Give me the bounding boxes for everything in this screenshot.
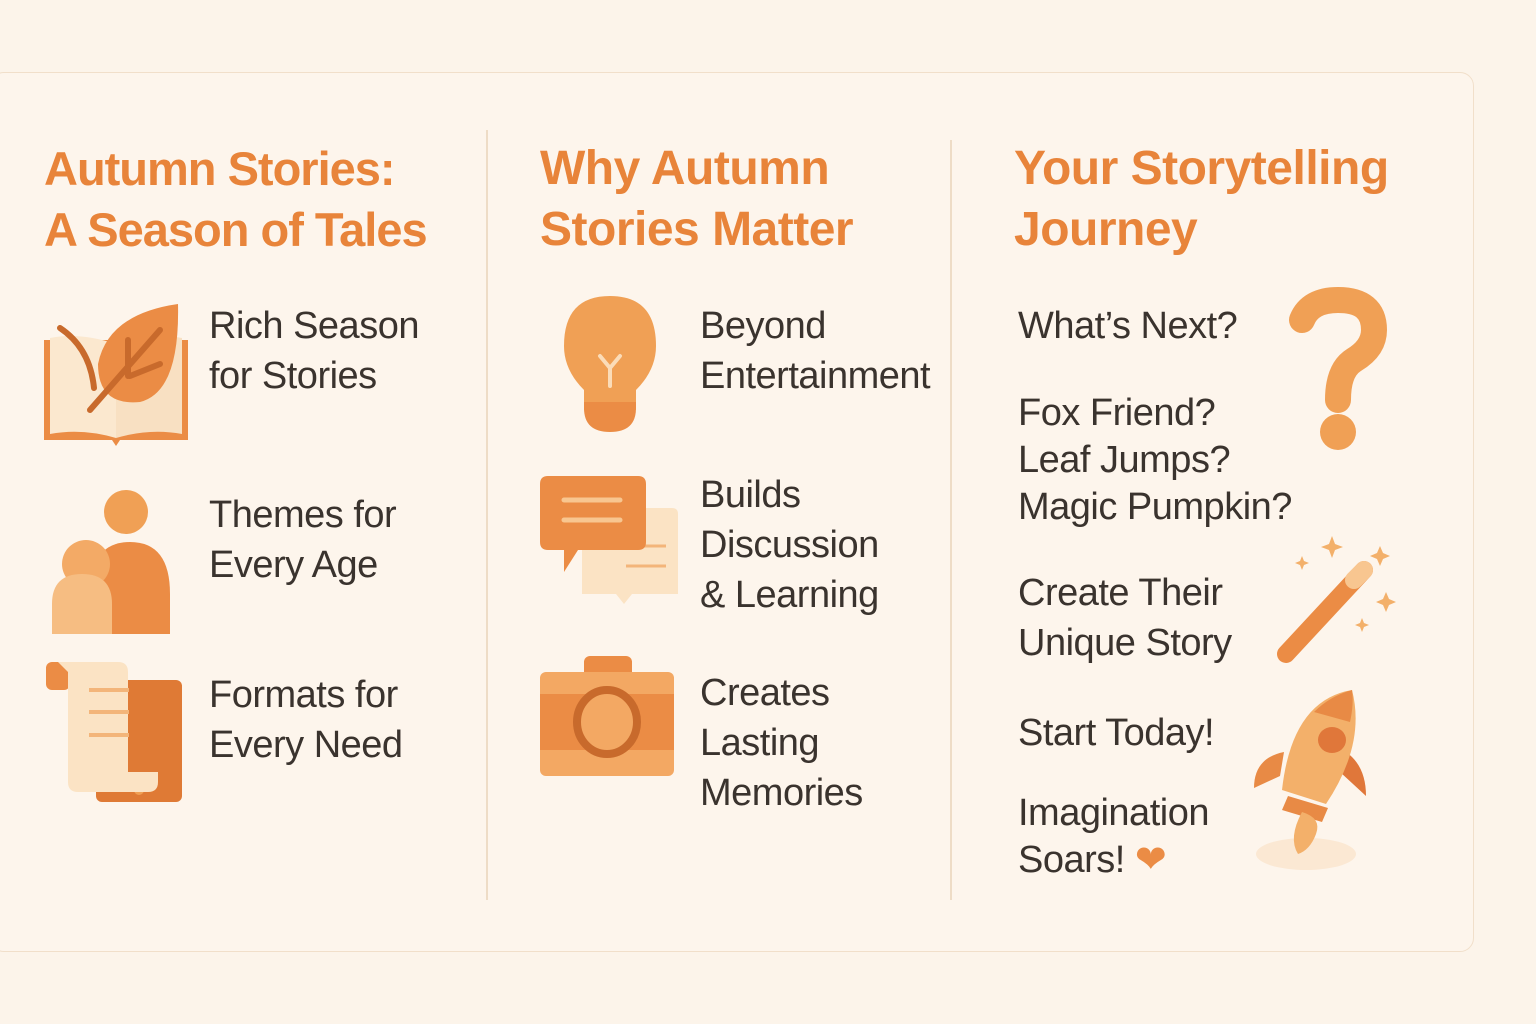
text: create story: Unique Story — [1018, 622, 1232, 664]
text: builds discussion — [700, 474, 879, 616]
heading: column 2: Why Autumn — [540, 142, 829, 195]
heading: column 2 — [540, 142, 853, 256]
text: formats — [209, 674, 403, 766]
text: questions: Fox Friend? — [1018, 392, 1215, 434]
text: builds discussion: Discussion — [700, 524, 879, 566]
text: imagination soars: Imagination — [1018, 792, 1209, 834]
icon: leaf on book — [44, 304, 188, 446]
text: questions: Leaf Jumps? — [1018, 439, 1230, 481]
text: themes — [209, 494, 396, 586]
text: create story — [1018, 572, 1232, 664]
text: builds discussion: Builds — [700, 474, 800, 516]
heading: column 1: Autumn Stories: — [44, 142, 395, 195]
icon: question mark — [1289, 287, 1387, 450]
heading: column 3 — [1014, 142, 1389, 256]
text: rich season: for Stories — [209, 355, 377, 397]
heading: column 1: A Season of Tales — [44, 203, 427, 256]
icon: people — [52, 490, 170, 634]
text: creates memories: Creates — [700, 672, 830, 714]
text: themes: Themes for — [209, 494, 396, 536]
text: creates memories: Memories — [700, 772, 863, 814]
text: imagination soars: Soars! ❤ — [1018, 839, 1166, 881]
text: questions: Magic Pumpkin? — [1018, 486, 1292, 528]
text: questions — [1018, 392, 1292, 528]
text: beyond entertainment: Entertainment — [700, 355, 930, 397]
heading: column 2: Stories Matter — [540, 203, 853, 256]
text: what's next: What’s Next? — [1018, 305, 1237, 347]
text: creates memories — [700, 672, 863, 814]
text: imagination soars — [1018, 792, 1209, 881]
text: beyond entertainment — [700, 305, 930, 397]
text: create story: Create Their — [1018, 572, 1223, 614]
text: formats: Every Need — [209, 724, 403, 766]
icon: magic wand — [1277, 536, 1396, 663]
text: start today: Start Today! — [1018, 712, 1214, 754]
text: rich season — [209, 305, 419, 397]
icon: camera — [540, 656, 674, 776]
heading: column 1 — [44, 142, 427, 256]
text: rich season: Rich Season — [209, 305, 419, 347]
icon: scroll and tablet — [46, 662, 182, 802]
text: themes: Every Age — [209, 544, 378, 586]
icon: lightbulb — [564, 296, 656, 432]
text: builds discussion: & Learning — [700, 574, 879, 616]
text: formats: Formats for — [209, 674, 398, 716]
text: beyond entertainment: Beyond — [700, 305, 826, 347]
icon: speech bubbles — [540, 476, 678, 604]
heading: column 3: Your Storytelling — [1014, 142, 1389, 195]
heading: column 3: Journey — [1014, 203, 1197, 256]
text: creates memories: Lasting — [700, 722, 819, 764]
icon: rocket — [1254, 690, 1366, 870]
